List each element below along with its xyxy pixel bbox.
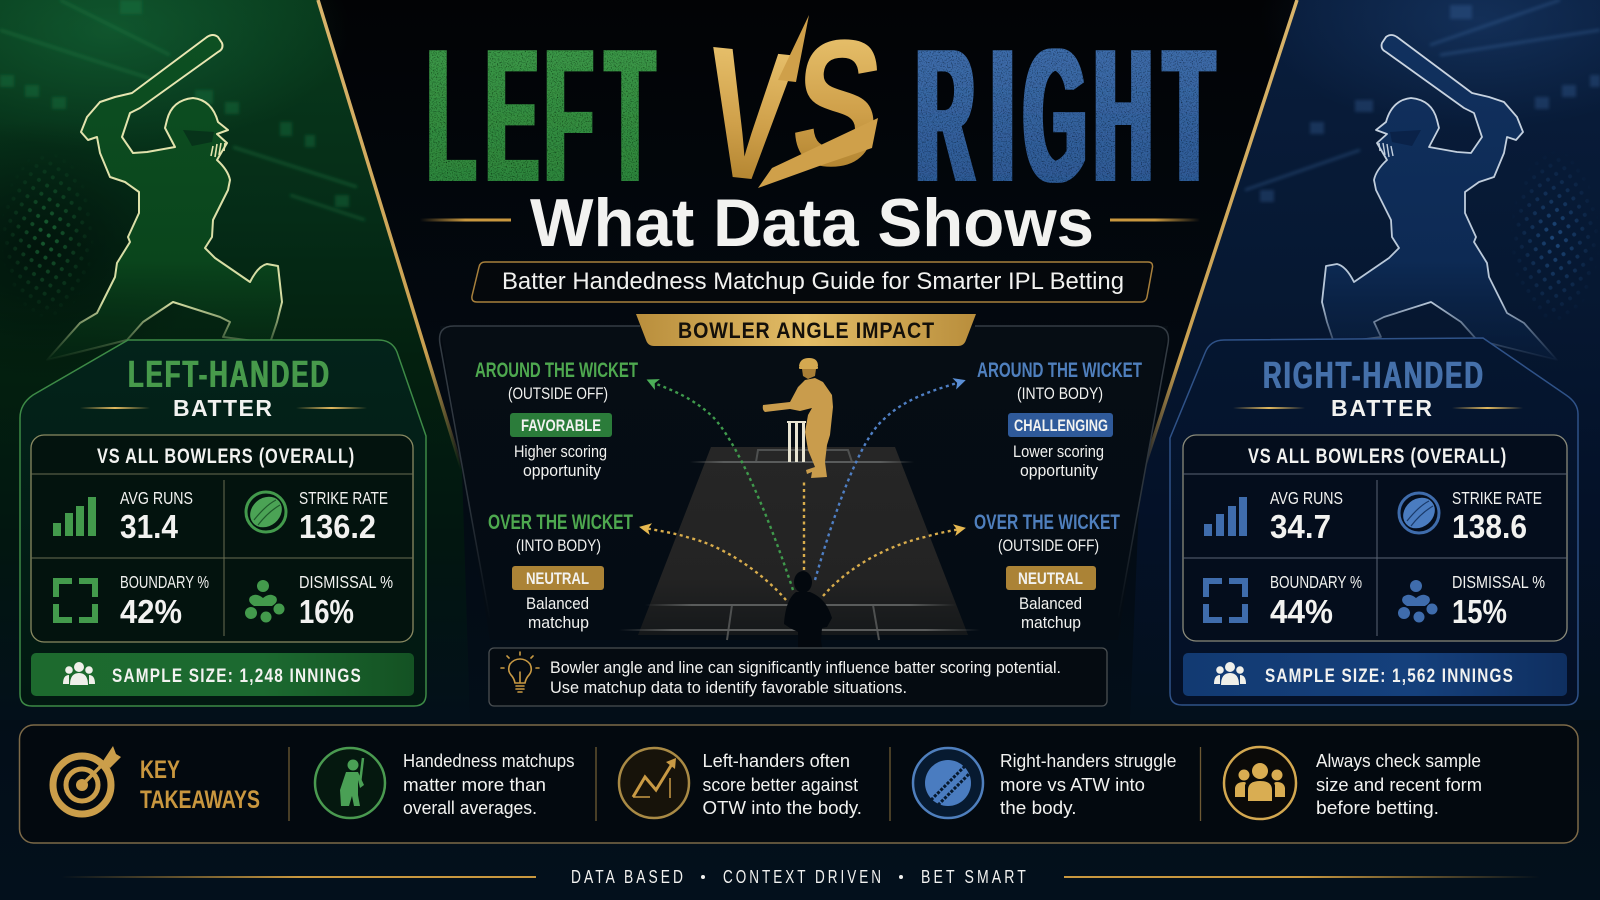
insight note: Use matchup data to identify favorable situations. — [550, 679, 907, 697]
bowler silhouette — [784, 571, 832, 648]
title word: VS: S — [784, 4, 891, 204]
heading: key takeaways: KEY — [140, 756, 180, 784]
callout: over the wicket left — [488, 511, 633, 632]
guide banner: Batter Handedness Matchup Guide for Smarter IPL Betting — [502, 268, 1124, 295]
footer — [61, 867, 1540, 887]
delivery arrows — [645, 382, 960, 600]
callout: over the wicket left: (INTO BODY) — [516, 536, 601, 555]
gold divider line left — [318, 0, 462, 470]
takeaway: left-handers: Left-handers often — [702, 751, 850, 771]
heading: key takeaways: TAKEAWAYS — [140, 786, 260, 814]
callout: over the wicket right: OVER THE WICKET — [974, 511, 1120, 534]
callout: over the wicket right: NEUTRAL — [1018, 569, 1083, 588]
takeaway: right-handers — [913, 748, 1176, 818]
pitch — [619, 447, 980, 640]
icon: people — [63, 662, 95, 685]
takeaway: right-handers: Right-handers struggle — [1000, 751, 1176, 771]
callout: over the wicket right: (OUTSIDE OFF) — [998, 536, 1099, 555]
callout: around the wicket left: (OUTSIDE OFF) — [508, 384, 608, 403]
callout: over the wicket right — [974, 511, 1120, 632]
callout: over the wicket left: NEUTRAL — [526, 569, 589, 588]
callout: around the wicket left: FAVORABLE — [521, 416, 601, 435]
stumps — [787, 421, 806, 462]
heading: key takeaways — [140, 756, 260, 814]
takeaway: sample size: before betting. — [1316, 798, 1439, 818]
takeaway: right-handers: more vs ATW into — [1000, 775, 1145, 795]
callout: over the wicket left: matchup — [528, 613, 589, 632]
callout: around the wicket left: Higher scoring — [514, 442, 607, 461]
stat: boundary — [56, 572, 209, 630]
callout: over the wicket right: Balanced — [1019, 594, 1082, 613]
icon: people — [1214, 662, 1246, 685]
stat: avg runs: 34.7 — [1270, 508, 1331, 545]
stat: boundary: BOUNDARY % — [1270, 572, 1362, 592]
title word: LEFT: LEFT — [427, 9, 654, 221]
takeaway: left-handers: score better against — [702, 775, 858, 795]
takeaway: handedness — [315, 748, 574, 818]
icon: light bulb — [501, 652, 539, 692]
callout: around the wicket right: (INTO BODY) — [1017, 384, 1103, 403]
takeaway: handedness: matter more than — [403, 775, 546, 795]
panel: left-handed batter — [20, 340, 426, 706]
stat: boundary — [1206, 572, 1362, 630]
section badge — [636, 314, 976, 346]
sample size bar — [31, 653, 414, 696]
insight note — [489, 648, 1107, 706]
footer: CONTEXT DRIVEN — [723, 867, 884, 887]
callout: around the wicket right — [977, 359, 1142, 480]
heading: right-handed: RIGHT-HANDED — [1263, 355, 1485, 397]
callout: around the wicket left: AROUND THE WICKET — [475, 359, 638, 382]
stat: strike rate: STRIKE RATE — [299, 488, 388, 508]
stat: boundary: 44% — [1270, 593, 1333, 630]
stat: strike rate — [244, 488, 388, 545]
stat: dismissal — [245, 572, 393, 630]
footer: DATA BASED — [571, 867, 686, 887]
stats table: VS ALL BOWLERS (OVERALL) — [97, 445, 355, 468]
sample size bar: SAMPLE SIZE: 1,562 INNINGS — [1265, 666, 1514, 687]
stat: strike rate: STRIKE RATE — [1452, 488, 1542, 508]
stat: avg runs — [1204, 488, 1343, 545]
title word: VS: V — [695, 6, 803, 222]
heading: batter: BATTER — [173, 395, 272, 421]
callout: around the wicket right: opportunity — [1020, 461, 1098, 480]
panel: bowler angle impact — [440, 314, 1168, 706]
callout: around the wicket left: opportunity — [523, 461, 601, 480]
heading: batter: BATTER — [1331, 395, 1432, 421]
callout: around the wicket right: Lower scoring — [1013, 442, 1104, 461]
gold batter figure — [763, 358, 833, 478]
stat: dismissal — [1398, 572, 1545, 630]
footer: BET SMART — [921, 867, 1029, 887]
heading: left-handed: LEFT-HANDED — [128, 354, 331, 396]
callout: over the wicket right: matchup — [1021, 613, 1081, 632]
panel: key takeaways — [20, 725, 1578, 843]
right batter silhouette — [1322, 35, 1557, 360]
stat: strike rate — [1397, 488, 1542, 545]
icon: target — [53, 746, 121, 814]
sample size bar: SAMPLE SIZE: 1,248 INNINGS — [112, 666, 362, 687]
insight note: Bowler angle and line can significantly influence batter scoring potential. — [550, 659, 1061, 677]
stats table — [1183, 435, 1567, 641]
stat: dismissal: 16% — [299, 593, 354, 630]
takeaway: sample size — [1224, 747, 1482, 819]
takeaway: handedness: Handedness matchups — [403, 751, 574, 771]
subtitle heading: What Data Shows — [530, 185, 1094, 261]
left batter silhouette — [47, 35, 282, 360]
stat: dismissal: DISMISSAL % — [299, 572, 393, 592]
stat: avg runs: AVG RUNS — [1270, 488, 1343, 508]
takeaway: sample size: size and recent form — [1316, 775, 1482, 795]
stat: avg runs: 31.4 — [120, 508, 179, 545]
stat: dismissal: 15% — [1452, 593, 1507, 630]
stat: strike rate: 138.6 — [1452, 508, 1527, 545]
stats table: VS ALL BOWLERS (OVERALL) — [1248, 445, 1507, 468]
title word: VS — [695, 4, 891, 222]
title — [427, 4, 1213, 222]
callout: around the wicket left — [475, 359, 638, 480]
stat: avg runs — [53, 488, 193, 545]
title word: RIGHT: RIGHT — [916, 9, 1213, 221]
takeaway: sample size: Always check sample — [1316, 751, 1481, 771]
sample size bar — [1183, 653, 1567, 696]
takeaway: left-handers: OTW into the body. — [702, 798, 862, 818]
guide banner — [472, 262, 1153, 302]
stat: strike rate: 136.2 — [299, 508, 376, 545]
stat: avg runs: AVG RUNS — [120, 488, 193, 508]
gold divider line right — [1140, 0, 1297, 480]
panel: right-handed batter — [1170, 338, 1578, 705]
takeaway: left-handers — [619, 748, 862, 818]
stats table — [31, 435, 413, 642]
callout: around the wicket right: AROUND THE WICKET — [977, 359, 1142, 382]
callout: over the wicket left: Balanced — [526, 594, 589, 613]
callout: around the wicket right: CHALLENGING — [1014, 416, 1108, 435]
takeaway: handedness: overall averages. — [403, 798, 537, 818]
stat: boundary: 42% — [120, 593, 182, 630]
stat: dismissal: DISMISSAL % — [1452, 572, 1545, 592]
section badge: BOWLER ANGLE IMPACT — [678, 318, 935, 343]
callout: over the wicket left: OVER THE WICKET — [488, 511, 633, 534]
takeaway: right-handers: the body. — [1000, 798, 1076, 818]
stat: boundary: BOUNDARY % — [120, 572, 209, 592]
